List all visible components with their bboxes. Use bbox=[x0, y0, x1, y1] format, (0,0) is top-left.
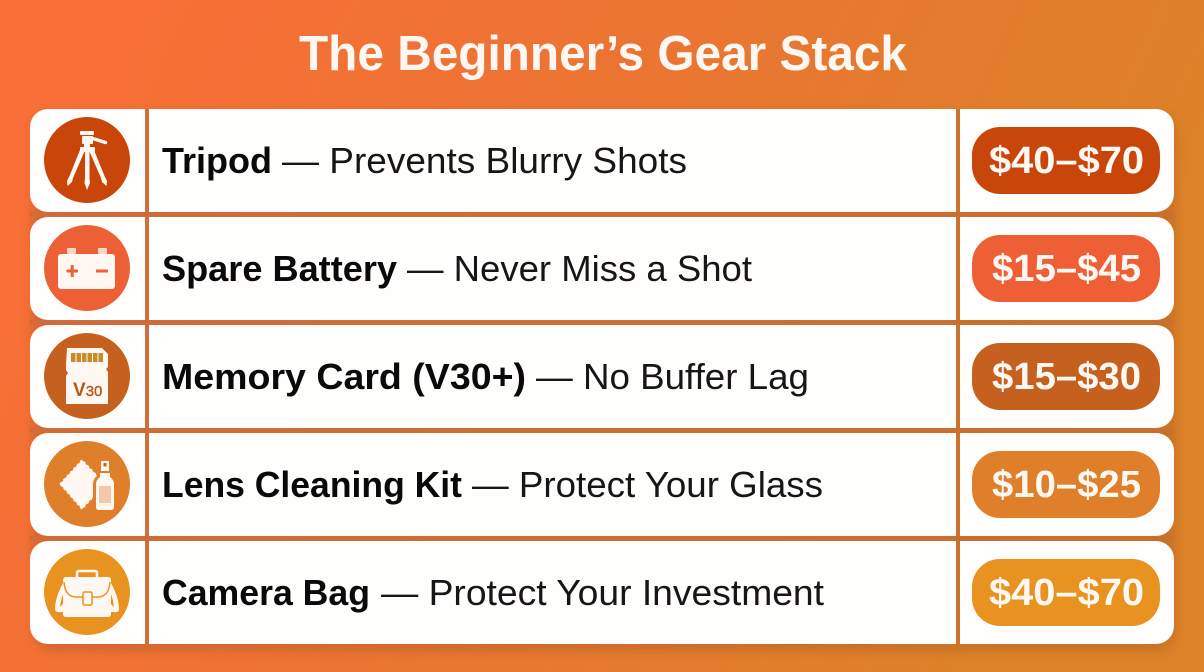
label: camera bag bbox=[162, 572, 824, 613]
label: memory card: Memory Card (V30+) bbox=[162, 356, 526, 397]
title: The Beginner’s Gear Stack bbox=[299, 27, 908, 81]
gap lines between rows bbox=[30, 212, 1174, 217]
price pill: spare battery: $15–$45 bbox=[992, 248, 1141, 290]
label: lens cleaning kit: Lens Cleaning Kit bbox=[162, 464, 462, 505]
row: camera bag bbox=[30, 541, 1174, 644]
row: spare battery bbox=[30, 217, 1174, 320]
price pill: lens cleaning kit: $10–$25 bbox=[992, 464, 1141, 506]
row: memory card bbox=[30, 325, 1174, 428]
label: spare battery: Spare Battery bbox=[162, 248, 397, 289]
label: lens cleaning kit bbox=[162, 464, 823, 505]
price pill: memory card bbox=[972, 343, 1160, 410]
price pill: lens cleaning kit bbox=[972, 451, 1160, 518]
label: memory card bbox=[162, 356, 809, 397]
table shadow bbox=[32, 113, 1176, 651]
label: spare battery: — Never Miss a Shot bbox=[407, 248, 752, 289]
label: camera bag: Camera Bag bbox=[162, 572, 370, 613]
label: tripod: Tripod bbox=[162, 140, 272, 181]
label: tripod: — Prevents Blurry Shots bbox=[282, 140, 687, 181]
icon: memory card bbox=[44, 333, 130, 419]
icon: cleaning kit bbox=[44, 441, 130, 527]
row: tripod bbox=[30, 109, 1174, 212]
price pill: spare battery bbox=[972, 235, 1160, 302]
icon: memory card: V30 bbox=[73, 380, 102, 401]
label: spare battery bbox=[162, 248, 752, 289]
price pill: camera bag: $40–$70 bbox=[989, 572, 1144, 614]
label: memory card: — No Buffer Lag bbox=[536, 356, 809, 397]
price pill: tripod bbox=[972, 127, 1160, 194]
price pill: tripod: $40–$70 bbox=[989, 140, 1144, 182]
icon: tripod bbox=[44, 117, 130, 203]
icon: camera bag bbox=[44, 549, 130, 635]
row: lens cleaning kit bbox=[30, 433, 1174, 536]
label: lens cleaning kit: — Protect Your Glass bbox=[472, 464, 823, 505]
price pill: memory card: $15–$30 bbox=[992, 356, 1141, 398]
label: camera bag: — Protect Your Investment bbox=[381, 572, 824, 613]
price pill: camera bag bbox=[972, 559, 1160, 626]
icon: battery bbox=[44, 225, 130, 311]
